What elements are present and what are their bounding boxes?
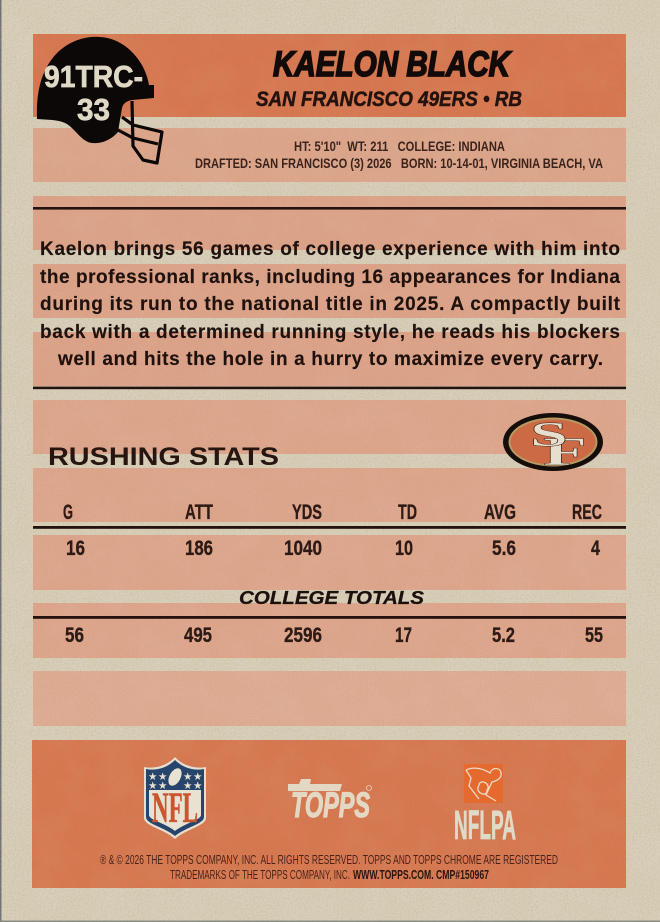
season stats row: 16 [66, 537, 85, 560]
college totals row: 55 [585, 624, 603, 647]
college totals row: 495 [184, 624, 212, 647]
copyright legal text [100, 853, 558, 882]
icon: NFL shield: NFL [152, 785, 198, 832]
heading: rushing stats: RUSHING STATS [48, 443, 279, 471]
panel: empty stripe [33, 671, 626, 726]
biography text: back with a determined running style, he reads his blockers [40, 322, 620, 343]
season stats row: 4 [591, 537, 600, 560]
panel: name banner [33, 34, 626, 117]
stats table header: G [63, 501, 73, 524]
season stats row: 1040 [284, 537, 322, 560]
divider lines [33, 207, 626, 619]
season stats row: 10 [395, 537, 413, 560]
copyright legal text: TRADEMARKS OF THE TOPPS COMPANY, INC. [170, 868, 350, 882]
icon: 49ers SF logo [503, 413, 603, 474]
college totals row: 56 [65, 624, 84, 647]
stats table header: REC [572, 501, 602, 524]
stats table header: ATT [185, 501, 213, 524]
player vitals: HT: 5'10" WT: 211 COLLEGE: INDIANA [294, 138, 505, 154]
copyright legal text: WWW.TOPPS.COM. CMP#150967 [353, 868, 489, 882]
icon: Topps logo [288, 779, 372, 825]
stats table header: TD [398, 501, 417, 524]
biography text: the professional ranks, including 16 appearances for Indiana [40, 267, 620, 288]
college totals row: 2596 [284, 624, 322, 647]
biography text [40, 239, 621, 370]
stats table header: AVG [484, 501, 516, 524]
panel: biography stripes [33, 196, 626, 386]
college totals row [65, 624, 603, 647]
college totals row: 5.2 [492, 624, 515, 647]
biography text: well and hits the hole in a hurry to maximize every carry. [57, 349, 603, 370]
panel: player info [33, 128, 626, 182]
stats table header [63, 501, 602, 524]
icon: NFL shield: ★★★★ [148, 780, 202, 792]
season stats row [66, 537, 600, 560]
icon: NFL shield [144, 757, 206, 839]
icon: NFLPA logo [454, 764, 516, 848]
panel: stats stripes [33, 400, 626, 658]
panel: footer [32, 740, 626, 888]
player name: KAELON BLACK [273, 45, 512, 84]
icon: NFL shield: ★★★★ [148, 771, 202, 783]
season stats row: 186 [185, 537, 213, 560]
card back: NFLPA [454, 802, 516, 848]
biography text: during its run to the national title in 2025. A compactly built [40, 294, 621, 315]
icon: 49ers SF logo: S [530, 415, 568, 454]
college totals row: 17 [395, 624, 412, 647]
icon: helmet with card number: 33 [77, 92, 110, 127]
team and position: SAN FRANCISCO 49ERS • RB [256, 88, 522, 111]
stats table header: YDS [292, 501, 322, 524]
icon: helmet with card number [37, 37, 162, 163]
heading: college totals: COLLEGE TOTALS [239, 588, 424, 608]
icon: 49ers SF logo: F [543, 429, 587, 474]
icon: Topps logo: TOPPS [291, 786, 370, 825]
season stats row: 5.6 [492, 537, 516, 560]
card number: 91TRC- [44, 59, 143, 94]
biography text: Kaelon brings 56 games of college experience with him into [40, 239, 620, 260]
registered mark [366, 786, 372, 790]
